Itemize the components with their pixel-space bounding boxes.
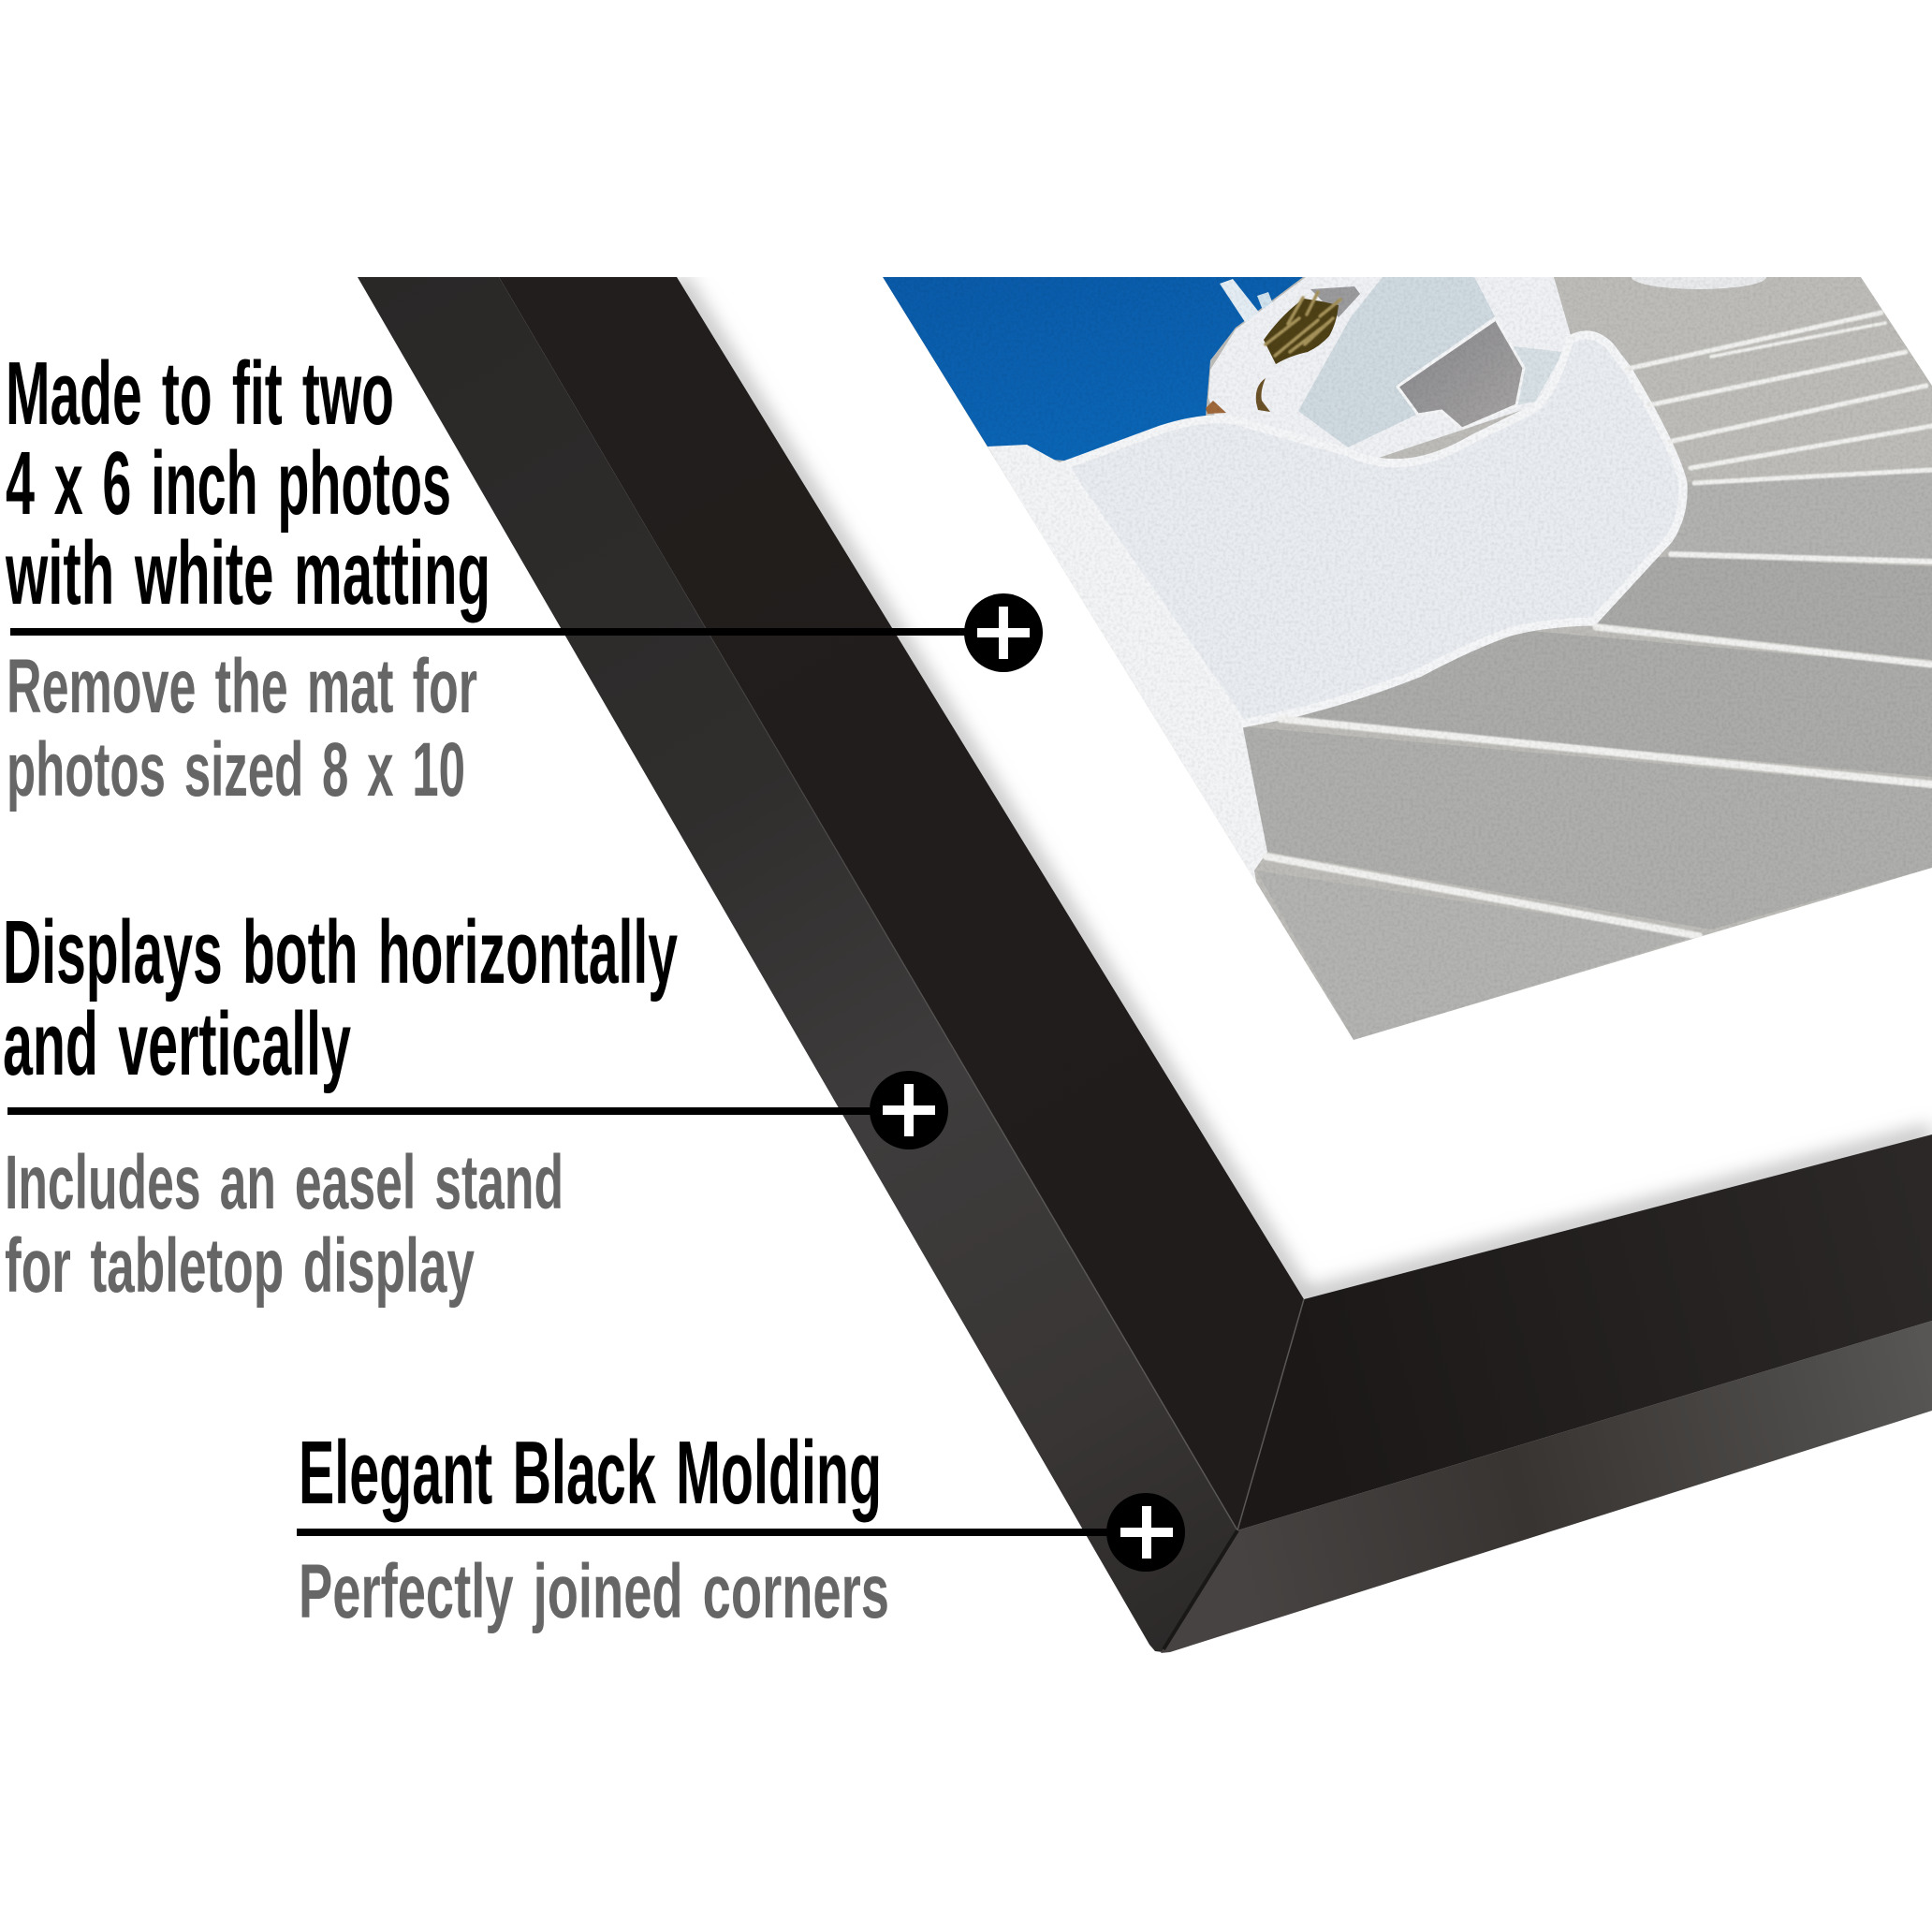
step C	[1287, 629, 1932, 777]
photo inside mat	[883, 277, 1932, 1040]
heading 2: Displays both horizontally	[3, 902, 678, 1003]
frame left side face	[358, 277, 1237, 1652]
mat shadow	[677, 277, 1932, 1299]
heading 2: and vertically	[3, 994, 351, 1094]
subtext 2	[5, 1140, 564, 1309]
subtext 2: Includes an easel stand	[5, 1140, 564, 1225]
subtext 3: Perfectly joined corners	[299, 1549, 889, 1634]
plus marker 2	[870, 1071, 948, 1149]
right building face	[1513, 346, 1561, 404]
sea	[883, 277, 1303, 461]
white chimney	[1220, 279, 1261, 322]
left whitewashed strip	[988, 445, 1267, 899]
step D	[1591, 557, 1932, 660]
small white post	[1257, 292, 1273, 309]
white building	[1208, 277, 1571, 458]
building window recess	[1398, 319, 1524, 429]
callout 1	[5, 344, 1043, 812]
leader line 3	[297, 1529, 1146, 1536]
heading 3: Elegant Black Molding	[299, 1423, 882, 1523]
frame left front face	[499, 277, 1304, 1530]
subtext 2: for tabletop display	[5, 1223, 475, 1309]
heading 1: Made to fit two	[6, 344, 394, 444]
subtext 1: photos sized 8 x 10	[7, 727, 465, 812]
heading 1	[5, 344, 490, 623]
heading 2	[3, 902, 678, 1094]
palm plant	[1206, 292, 1340, 414]
top right white dish	[1632, 277, 1766, 289]
building face	[1298, 277, 1495, 447]
heading 1: 4 x 6 inch photos	[6, 433, 451, 534]
plus marker 1	[964, 593, 1043, 672]
black frame	[358, 277, 1932, 1653]
callout 2	[3, 902, 948, 1309]
photo base: upper terrace	[883, 277, 1932, 1040]
photo grain	[842, 262, 1932, 1105]
step E	[1666, 473, 1932, 562]
far recess behind palm	[1310, 286, 1360, 317]
callout 3	[297, 1423, 1185, 1634]
subtext 1: Remove the mat for	[7, 644, 477, 729]
step A	[1256, 871, 1697, 1040]
whitewashed wall	[1064, 335, 1683, 724]
frame bottom front face	[1237, 1134, 1932, 1530]
leader line 2	[7, 1107, 909, 1115]
heading 1: with white matting	[5, 523, 490, 623]
frame seams	[655, 543, 1304, 1649]
step B	[1242, 726, 1932, 929]
subtext 1	[7, 644, 477, 812]
frame bottom side face	[1161, 1321, 1932, 1653]
step edge lines	[1266, 313, 1932, 936]
leader line 1	[10, 628, 1003, 636]
plus marker 3	[1106, 1493, 1185, 1572]
